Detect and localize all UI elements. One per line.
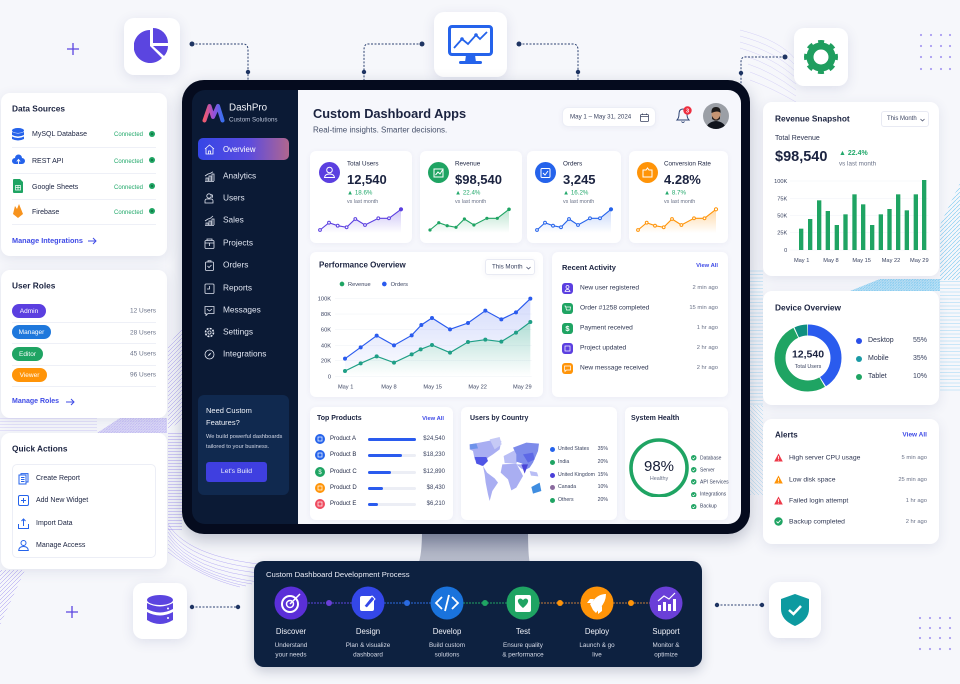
status: api services: API Services — [700, 479, 729, 485]
product d: $8,430 — [427, 485, 445, 491]
dropdown — [881, 111, 929, 127]
value: 12,540 — [347, 171, 387, 186]
icon: orders — [535, 162, 556, 183]
donut value: 12,540 — [792, 348, 824, 360]
step: deploy: Deploy — [585, 627, 609, 636]
promo text: We build powerful dashboards — [206, 434, 282, 440]
product a: Product A — [330, 436, 356, 442]
icon: revenue — [428, 162, 449, 183]
icon: shield tile — [769, 582, 821, 638]
alert: backup completed: 2 hr ago — [906, 519, 927, 525]
dropdown: This Month — [887, 116, 917, 122]
step: test: & performance — [502, 652, 544, 658]
label: Orders — [563, 160, 582, 167]
legend: canada: Canada — [558, 484, 576, 490]
product b: $18,230 — [423, 452, 445, 458]
date picker: May 1 – May 31, 2024 — [570, 114, 631, 121]
line chart: Revenue — [348, 282, 371, 288]
label: Conversion Rate — [664, 160, 711, 167]
row: Firebase — [13, 204, 155, 218]
legend: united states: 35% — [598, 446, 608, 452]
heading: Quick Actions — [12, 444, 67, 454]
brand name: DashPro — [229, 103, 267, 114]
badge: editor: Editor — [19, 351, 36, 358]
status: api services — [690, 476, 728, 487]
heading: Revenue Snapshot — [775, 113, 850, 123]
line chart: 40K — [321, 343, 331, 349]
alert: low disk — [763, 472, 939, 488]
sparkline — [428, 208, 511, 232]
activity: project updated: 2 hr ago — [697, 345, 718, 351]
badge: manager: Manager — [19, 329, 44, 336]
bar chart: 100K — [774, 179, 788, 185]
icon: person — [18, 540, 29, 551]
activity: payment received: Payment received — [580, 324, 633, 331]
row: REST API: Connected — [114, 158, 143, 164]
legend: united kingdom — [546, 469, 611, 481]
connector dots — [326, 600, 634, 606]
bar chart: May 15 — [852, 258, 871, 264]
nav: integrations — [204, 349, 266, 360]
product d: Product D — [330, 485, 357, 491]
panel: system health — [625, 407, 728, 520]
line chart: May 22 — [468, 384, 487, 390]
nav: orders — [205, 260, 248, 271]
kpi: conversion rate — [629, 151, 728, 243]
main screen — [298, 90, 741, 524]
step: discover: Discover — [276, 627, 307, 636]
icon: import — [18, 518, 29, 529]
dropdown: This Month — [492, 264, 523, 271]
row: Google Sheets — [13, 179, 155, 193]
nav: analytics: Analytics — [223, 171, 256, 181]
row: MySQL Database — [12, 128, 155, 140]
product e: Product E — [330, 501, 356, 507]
legend: tablet: Tablet — [868, 373, 887, 380]
activity: new message: 2 hr ago — [697, 365, 718, 371]
bar chart: 25K — [777, 231, 788, 237]
bar chart: May 1 — [794, 258, 809, 264]
icon: gear tile — [794, 28, 848, 86]
nav: orders: Orders — [223, 260, 248, 270]
legend: mobile: Mobile — [868, 355, 889, 362]
comparison: vs last month — [347, 199, 378, 205]
action: create report: Create Report — [36, 475, 80, 482]
step: deploy: Launch & go — [579, 642, 615, 649]
line chart — [318, 282, 532, 390]
badge: admin — [12, 304, 46, 318]
kpi: orders — [527, 151, 621, 243]
bar chart: 0 — [784, 248, 787, 254]
step: test: Ensure quality — [503, 642, 544, 649]
process diagram — [254, 561, 702, 667]
nav: sales: Sales — [223, 215, 244, 225]
step: design: Design — [356, 627, 380, 636]
alert: backup completed: Backup completed — [789, 518, 845, 525]
dropdown — [485, 259, 535, 275]
label: Total Revenue — [775, 135, 820, 142]
step: support: Support — [652, 627, 680, 636]
panel: development process — [254, 561, 702, 667]
icon: plus bottom left — [66, 606, 78, 618]
heading: Users by Country — [470, 415, 528, 422]
product b: Product B — [330, 452, 356, 458]
legend: mobile — [853, 352, 929, 366]
panel: quick actions — [1, 433, 167, 569]
panel: device overview — [763, 291, 939, 405]
delta: ▲ 22.4% — [455, 190, 480, 197]
comparison: vs last month — [563, 199, 594, 205]
nav: users — [204, 193, 245, 204]
alert: low disk: Low disk space — [789, 476, 835, 483]
panel: revenue snapshot — [763, 102, 939, 276]
bar chart — [763, 102, 939, 276]
alert: backup completed — [763, 514, 939, 530]
step: deploy: live — [592, 652, 602, 658]
icon: arrow — [88, 238, 97, 244]
line chart: May 15 — [423, 384, 442, 390]
step: test: Test — [516, 627, 531, 636]
sparkline — [535, 207, 614, 232]
row: MySQL Database: MySQL Database — [32, 131, 87, 138]
date picker — [562, 107, 656, 127]
product d — [310, 480, 453, 496]
heading: System Health — [631, 415, 679, 422]
logo — [202, 104, 225, 122]
panel: alerts — [763, 419, 939, 544]
line chart: 0 — [328, 374, 331, 380]
legend: tablet — [853, 370, 929, 384]
link: view all: View All — [696, 263, 718, 269]
legend: others: 20% — [598, 497, 608, 503]
legend: mobile: 35% — [913, 355, 927, 362]
delta: ▲ 8.7% — [664, 190, 686, 197]
text: manager users: 28 Users — [130, 329, 156, 336]
label: Total Users — [347, 160, 378, 167]
line chart: Orders — [391, 282, 408, 288]
delta: ▲ 18.6% — [347, 190, 372, 197]
step: design: dashboard — [353, 652, 383, 658]
legend: india — [546, 456, 611, 468]
nav: settings: Settings — [223, 327, 253, 337]
step: discover — [274, 586, 308, 658]
link: view all: View All — [422, 416, 444, 422]
kpi: total users — [310, 151, 412, 243]
promo panel — [198, 395, 289, 495]
label: Revenue — [455, 160, 480, 167]
link: manage roles: Manage Roles — [12, 398, 59, 405]
promo button — [206, 462, 267, 482]
icon: users — [319, 162, 340, 183]
heading: Alerts — [775, 431, 798, 440]
badge: viewer — [12, 368, 47, 382]
value: $98,540 — [775, 149, 827, 165]
panel: users by country — [461, 407, 617, 520]
product c: $ — [318, 470, 322, 476]
step: develop: Develop — [433, 627, 462, 636]
legend: others: Others — [558, 497, 574, 503]
link: view all: View All — [902, 431, 927, 438]
legend: united states — [546, 443, 611, 455]
product c: Product C — [330, 469, 357, 475]
legend: tablet: 10% — [913, 373, 927, 380]
subtitle: Real-time insights. Smarter decisions. — [313, 125, 447, 134]
nav: integrations: Integrations — [223, 349, 266, 359]
activity: new message — [562, 363, 718, 374]
nav: messages: Messages — [223, 305, 261, 315]
nav: analytics — [204, 171, 256, 182]
badge: editor — [12, 347, 43, 361]
bar chart: 50K — [777, 213, 788, 219]
alert: high cpu — [763, 450, 939, 466]
activity: project updated — [562, 343, 718, 354]
nav: overview (active) — [198, 138, 289, 160]
avatar — [703, 103, 729, 129]
nav: sales — [204, 215, 244, 226]
step: discover: Understand — [275, 642, 308, 649]
row: MySQL Database: Connected — [114, 132, 143, 138]
legend: canada — [546, 481, 611, 493]
donut chart — [774, 324, 842, 392]
nav: overview (active): Overview — [223, 145, 256, 154]
icon: monitor chart tile — [434, 12, 507, 77]
heading: Recent Activity — [562, 262, 616, 271]
panel: top products — [310, 407, 453, 520]
value: $98,540 — [455, 171, 502, 186]
step: test — [502, 586, 544, 658]
status: integrations — [690, 488, 728, 500]
legend: united kingdom: United Kingdom — [558, 472, 595, 478]
activity: new message: New message received — [580, 364, 649, 371]
product c: $12,890 — [423, 469, 445, 475]
action list — [12, 464, 156, 558]
legend: united states: United States — [558, 446, 589, 452]
badge: admin: Admin — [20, 308, 38, 315]
activity: new user — [562, 283, 718, 294]
step: design: Plan & visualize — [346, 642, 391, 649]
line chart: 100K — [318, 296, 331, 302]
sparkline — [636, 207, 718, 232]
monitor stand — [419, 534, 530, 561]
row: REST API: REST API — [32, 158, 63, 165]
icon: notification bell — [676, 106, 692, 123]
heading: Performance Overview — [319, 261, 406, 270]
sparkline — [318, 207, 404, 232]
legend: desktop: Desktop — [868, 337, 894, 344]
panel: recent activity — [552, 252, 728, 397]
icon: add widget — [18, 495, 29, 506]
status: server: Server — [700, 467, 715, 473]
activity: order completed: Order #1258 completed — [580, 304, 649, 311]
heading: Device Overview — [775, 302, 841, 312]
nav: settings — [204, 327, 253, 338]
icon: pie chart tile — [124, 18, 180, 75]
panel: performance overview — [310, 252, 543, 397]
step: develop: solutions — [435, 652, 459, 658]
sidebar — [192, 90, 298, 524]
status: database: Database — [700, 455, 721, 461]
row: REST API — [12, 154, 155, 165]
line chart: May 8 — [381, 384, 397, 390]
heading: Custom Dashboard Development Process — [266, 570, 410, 579]
value: 4.28% — [664, 171, 701, 186]
page title: Custom Dashboard Apps — [313, 106, 466, 121]
icon: report — [18, 473, 28, 484]
activity: order completed — [562, 303, 718, 314]
legend: india: 20% — [598, 459, 608, 465]
alert: failed login — [763, 493, 939, 509]
activity: project updated: Project updated — [580, 344, 626, 351]
alert: failed login: 1 hr ago — [906, 498, 927, 504]
product c — [310, 464, 453, 480]
legend: desktop: 55% — [913, 337, 927, 344]
activity: payment received: 1 hr ago — [697, 325, 718, 331]
product e — [310, 496, 453, 512]
legend: others — [546, 494, 611, 506]
line chart: May 29 — [513, 384, 532, 390]
step: design — [346, 586, 391, 658]
comparison: vs last month — [839, 160, 876, 167]
status: database — [690, 452, 728, 463]
legend: desktop — [853, 334, 929, 348]
comparison: vs last month — [664, 199, 695, 205]
status: integrations: Integrations — [700, 491, 726, 497]
gauge caption: Healthy — [650, 476, 668, 482]
delta: ▲ 16.2% — [563, 190, 588, 197]
panel: data sources — [1, 93, 167, 256]
connector line — [305, 602, 650, 604]
row: Firebase: Firebase — [32, 209, 59, 216]
product b — [310, 447, 453, 463]
line chart: May 1 — [338, 384, 353, 390]
step: develop — [429, 586, 465, 658]
line chart: 60K — [321, 328, 331, 334]
comparison: vs last month — [455, 199, 486, 205]
step: discover: your needs — [275, 652, 307, 658]
action: add new widget: Add New Widget — [36, 497, 88, 504]
nav: reports — [204, 283, 252, 294]
status: backup — [690, 500, 728, 512]
heading: Top Products — [317, 415, 362, 422]
kpi: revenue — [420, 151, 522, 243]
line chart: 20K — [321, 359, 331, 365]
link: manage integrations: Manage Integrations — [12, 236, 83, 245]
row: Firebase: Connected — [114, 209, 143, 215]
gauge ring — [629, 437, 689, 497]
badge: viewer: Viewer — [20, 372, 39, 379]
nav: projects — [204, 238, 253, 249]
promo text: tailored to your business. — [206, 444, 269, 450]
heading: User Roles — [12, 281, 55, 291]
activity: order completed: 15 min ago — [689, 305, 718, 311]
icon: plus top left — [67, 43, 79, 55]
row: Google Sheets: Google Sheets — [32, 184, 78, 191]
bar chart: May 22 — [882, 258, 900, 264]
text: admin users: 12 Users — [130, 307, 156, 314]
activity: payment received: $ — [565, 324, 570, 333]
activity: new user: 2 min ago — [693, 285, 718, 291]
action: import data: Import Data — [36, 520, 73, 527]
bar chart: 75K — [777, 196, 788, 202]
bar chart: May 29 — [910, 258, 929, 264]
text: editor users: 45 Users — [130, 350, 156, 357]
activity: payment received — [562, 323, 718, 334]
icon: notification bell: 3 — [686, 108, 689, 114]
alert: high cpu: 5 min ago — [902, 455, 927, 461]
product e: $6,210 — [427, 501, 445, 507]
step: support: optimize — [654, 652, 678, 658]
action: manage access: Manage Access — [36, 542, 85, 549]
legend: united kingdom: 15% — [598, 472, 608, 478]
icon: conversion — [637, 162, 658, 183]
promo text — [206, 434, 282, 450]
donut caption: Total Users — [795, 364, 821, 370]
icon: database tile — [133, 583, 187, 639]
product a: $24,540 — [423, 436, 445, 442]
legend: india: India — [558, 459, 569, 465]
activity: new user: New user registered — [580, 284, 639, 291]
row: Google Sheets: Connected — [114, 184, 143, 190]
alert: high cpu: High server CPU usage — [789, 454, 860, 461]
bar chart: May 8 — [823, 258, 839, 264]
promo heading: Need Custom Features? — [206, 406, 252, 427]
badge: manager — [12, 325, 51, 339]
legend: canada: 10% — [598, 484, 608, 490]
nav: users: Users — [223, 193, 245, 203]
text: viewer users: 96 Users — [130, 371, 156, 378]
delta: ▲ 22.4% — [839, 150, 868, 157]
promo button: Let's Build — [221, 468, 252, 475]
step: develop: Build custom — [429, 642, 465, 649]
step: deploy — [579, 586, 615, 658]
value: 3,245 — [563, 171, 596, 186]
gauge value: 98% — [644, 458, 674, 475]
world map — [468, 436, 543, 501]
nav: messages — [204, 305, 261, 316]
nav: reports: Reports — [223, 283, 252, 293]
nav: projects: Projects — [223, 238, 253, 248]
product a — [315, 434, 445, 444]
panel: user roles — [1, 270, 167, 418]
step: support — [650, 586, 682, 658]
icon: arrow — [66, 398, 75, 406]
status: backup: Backup — [700, 503, 717, 509]
alert: failed login: Failed login attempt — [789, 497, 848, 504]
brand tagline: Custom Solutions — [229, 116, 278, 123]
line chart: 80K — [321, 312, 331, 318]
step: support: Monitor & — [653, 642, 680, 649]
heading: Data Sources — [12, 104, 65, 114]
status: server — [690, 464, 728, 475]
monitor — [182, 80, 750, 534]
alert: low disk: 25 min ago — [898, 476, 927, 482]
